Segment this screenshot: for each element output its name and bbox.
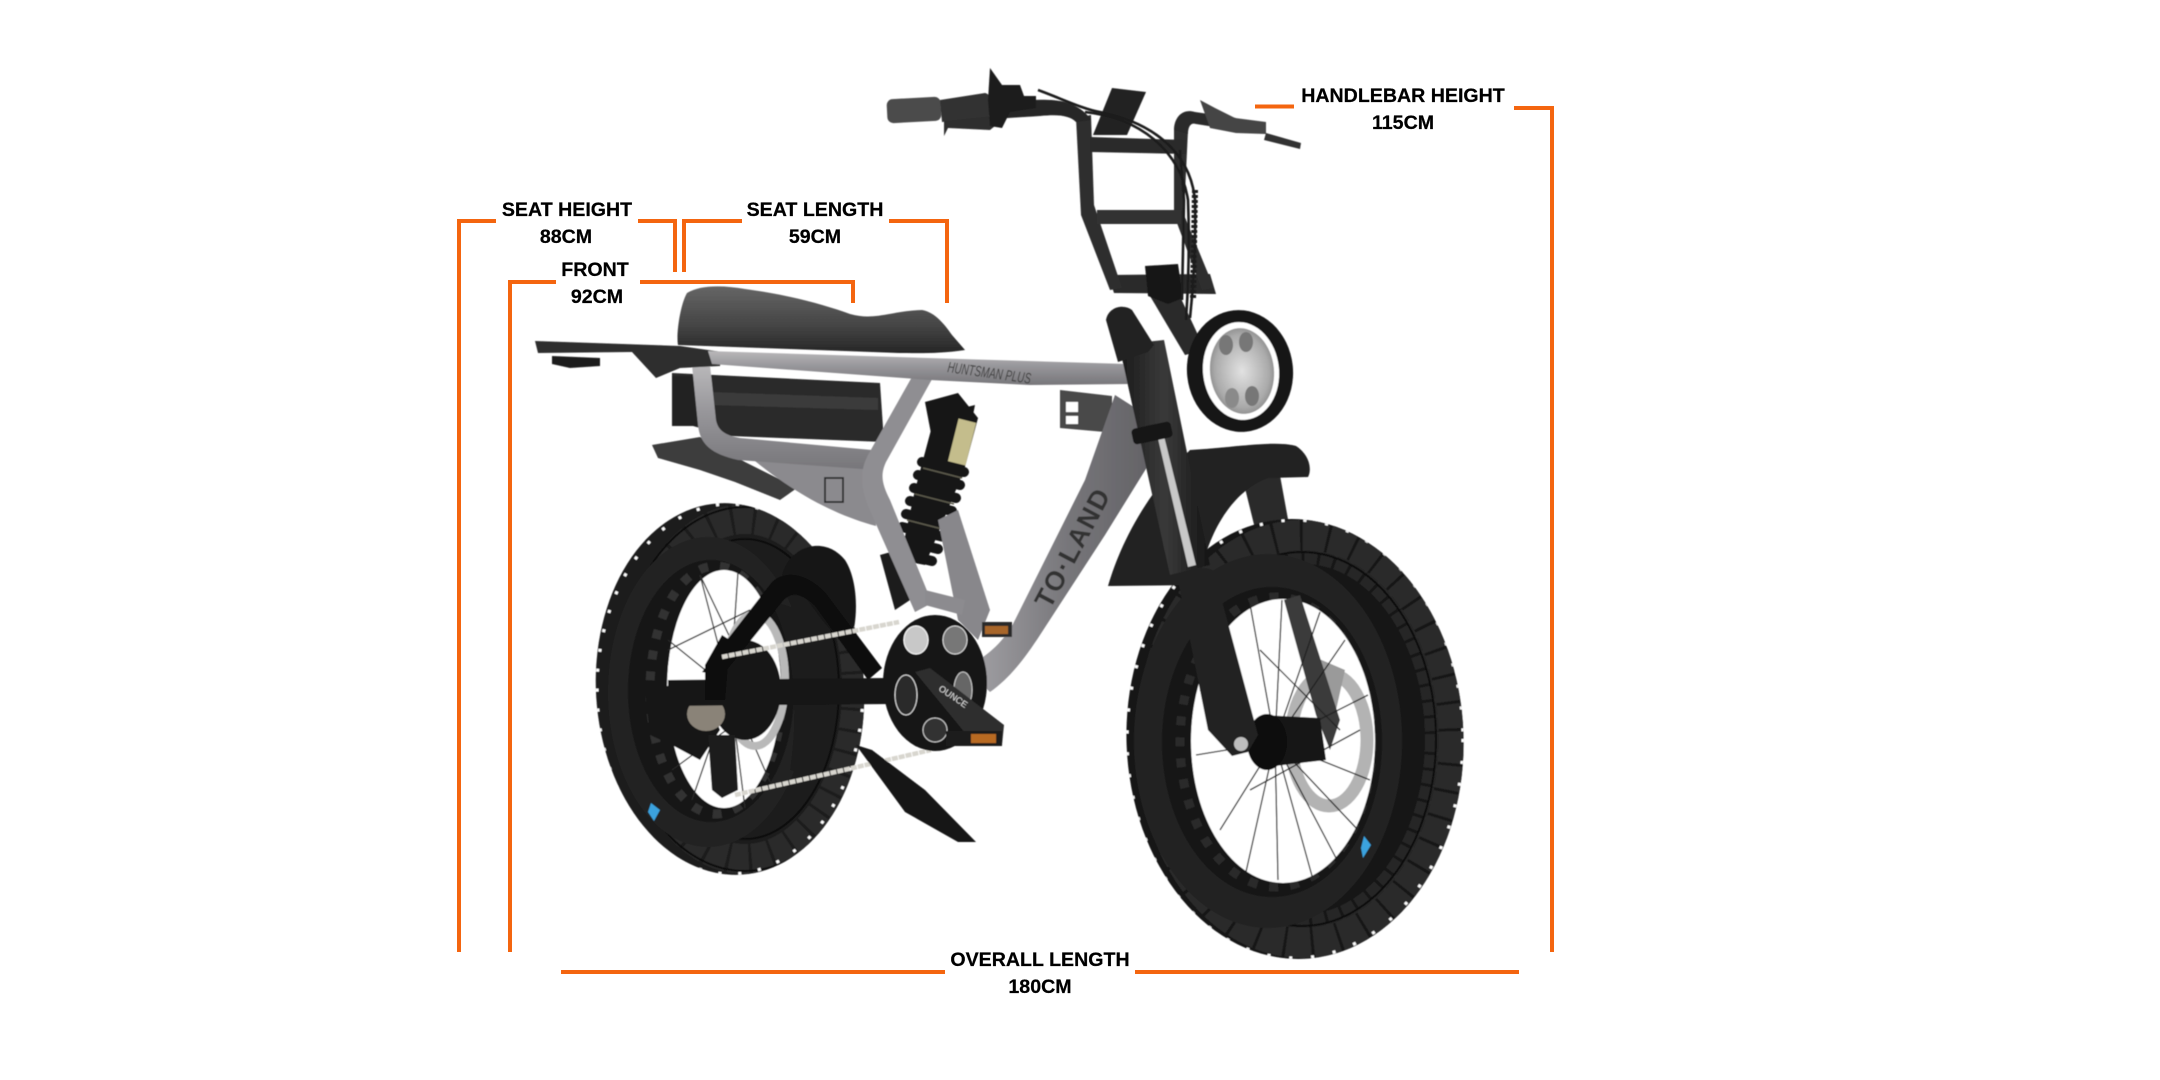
rear wheel opening: [667, 570, 781, 808]
bike photo: [535, 68, 1471, 965]
headlight: [1181, 305, 1299, 437]
headlight lens: [1206, 325, 1278, 417]
handlebar label: HANDLEBAR HEIGHT: [1301, 85, 1505, 107]
shock absorber: [898, 393, 978, 565]
brake caliper: [1310, 655, 1345, 715]
front label: 92CM: [571, 286, 623, 308]
chainring: [883, 615, 1012, 751]
derailleur body: [645, 680, 720, 760]
rear spokes: [668, 572, 770, 808]
fork lower leg: [1178, 568, 1258, 756]
front bracket: [510, 282, 853, 952]
cable run: [1038, 90, 1195, 320]
seat height label: 88CM: [540, 226, 592, 248]
dimension: seat length: [684, 199, 947, 303]
brake disc: [1291, 674, 1367, 806]
top tube lettering: HUNTSMAN PLUS: [946, 359, 1032, 388]
dimension: seat height: [459, 199, 675, 952]
overall length bar: [561, 970, 1519, 974]
front sidewall: [1134, 554, 1402, 928]
seat length label: 59CM: [789, 226, 841, 248]
left lever perch: [988, 68, 1036, 128]
right bar: [1174, 111, 1236, 134]
LED cells: [1219, 335, 1233, 355]
frame logo mark: [825, 478, 843, 502]
rear hub: [709, 640, 781, 740]
rear subframe tube: [692, 365, 876, 470]
front rim: [1162, 587, 1382, 897]
seat: [677, 286, 965, 353]
throttle: [940, 93, 992, 122]
cassette: [687, 697, 725, 731]
far fork lower: [1284, 595, 1340, 750]
coil spring: [898, 462, 964, 561]
chainring: OUNCE: [937, 683, 969, 710]
battery body: [672, 373, 884, 442]
left bar: [990, 100, 1091, 122]
derailleur cage: [708, 735, 738, 798]
rear rim: [628, 560, 794, 822]
handlebar bracket: [1255, 106, 1552, 952]
seat length bracket: [684, 221, 947, 303]
rear fender: [782, 546, 856, 650]
upper swingarm: [702, 575, 882, 680]
piggyback: [925, 393, 978, 478]
lower crossbar: [1108, 274, 1216, 294]
top chain run: [722, 622, 899, 657]
battery: [672, 373, 884, 442]
rim wall cutouts: [650, 566, 782, 814]
far pedal: [982, 622, 1012, 637]
left grip: [886, 97, 942, 123]
front tyre: [1119, 513, 1471, 965]
ring disc: [883, 615, 987, 751]
front wheel opening: [1191, 599, 1375, 883]
fork clamp: [1131, 421, 1173, 445]
dimension: overall length: [561, 949, 1519, 998]
front fender: [1108, 444, 1310, 586]
overall length label: OVERALL LENGTH: [950, 949, 1130, 971]
shock backing: [900, 405, 975, 565]
shock lower mount: [880, 548, 925, 610]
headlight bezel: [1181, 305, 1299, 437]
right riser: [1174, 130, 1214, 290]
rear rack: [535, 341, 722, 378]
front fork: [1106, 292, 1258, 756]
bottom chain run: [735, 750, 931, 795]
rim wall cutouts: [1180, 597, 1372, 887]
overall length label: 180CM: [1008, 976, 1072, 998]
far tyre inner seen through wheel: [770, 600, 820, 780]
lower swingarm: [668, 678, 892, 706]
diagonal seat tube: [862, 368, 936, 612]
front wheel: [1119, 513, 1471, 965]
left brake lever: [944, 116, 1000, 136]
dimension: front: [510, 259, 853, 952]
headlight halo: [1198, 318, 1284, 424]
right lever and grip: [1200, 100, 1266, 134]
rear tyre: [585, 495, 875, 883]
dimension: handlebar height: [1255, 85, 1552, 952]
rear stay tube: [938, 510, 990, 640]
axle nut: [1234, 737, 1248, 751]
rack light: [552, 356, 600, 368]
near pedal: [946, 731, 1002, 746]
mid crossbar: [1097, 210, 1181, 224]
far fork leg: [1243, 470, 1345, 805]
kickstand: [856, 745, 976, 842]
down tube lettering: TO·LAND: [1029, 484, 1116, 613]
front hub: [1258, 715, 1326, 766]
frame gusset: [742, 450, 876, 526]
rear sidewall: [608, 537, 808, 847]
down tube: [965, 395, 1170, 692]
front label: FRONT: [561, 259, 629, 281]
fork upper tube: [1119, 340, 1210, 575]
seat length label: SEAT LENGTH: [747, 199, 883, 221]
dropout: [705, 635, 730, 700]
fork crown cap: [1106, 307, 1154, 362]
crank arm: [915, 668, 1004, 745]
frame bracket: [1060, 390, 1112, 432]
upper crossbar: [1090, 137, 1186, 154]
reservoir gold: [948, 418, 976, 466]
ring cutouts: [904, 626, 928, 654]
seat height bracket: [459, 221, 675, 952]
rear disc: [725, 614, 785, 746]
rear wheel: [594, 502, 865, 876]
top tube: [708, 351, 1130, 385]
front spokes: [1196, 600, 1370, 880]
steerer tube: [1150, 292, 1205, 355]
display: [1093, 88, 1146, 135]
seat height label: SEAT HEIGHT: [502, 199, 632, 221]
front tyre logo: [1361, 836, 1371, 858]
handlebar label: 115CM: [1372, 112, 1434, 134]
left riser: [1076, 115, 1122, 290]
lower bar assembly: [1108, 264, 1216, 304]
rear mudguard: [652, 437, 797, 500]
stem clamp: [1145, 264, 1183, 304]
right grip end: [1264, 133, 1301, 149]
rear tyre logo: [648, 803, 660, 821]
